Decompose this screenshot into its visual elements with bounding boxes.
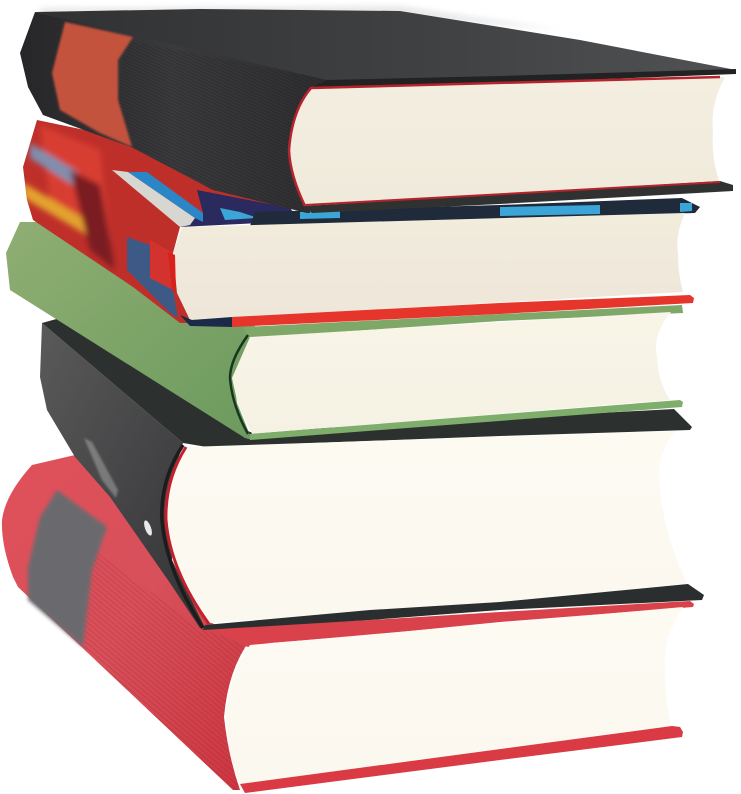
book 1: top black book: [20, 6, 736, 213]
pages of black book: [167, 431, 690, 623]
pages: [290, 77, 725, 206]
red edge strip: [168, 252, 176, 292]
red headband: [166, 447, 209, 624]
pages of red book: [226, 607, 683, 784]
red top edge of pages: [289, 77, 720, 206]
flap artwork patch: [220, 208, 258, 220]
book 4: black book: [40, 318, 704, 630]
spine corner art: [127, 237, 178, 318]
book 5: red bottom book: [2, 455, 694, 793]
blurred spine artwork: [22, 125, 115, 270]
green top cover: [243, 305, 683, 338]
blurred spine lettering: [84, 438, 118, 498]
faint shadow along the top: [40, 6, 560, 30]
dark blue corner: [180, 315, 232, 327]
patterned cover edge: [250, 198, 700, 226]
top cover: [35, 9, 736, 84]
red bottom cover: [240, 726, 683, 793]
spine of green book: [6, 222, 255, 440]
spine mark: [142, 519, 154, 537]
cover flap base: [180, 190, 300, 227]
bottom cover: [305, 181, 733, 213]
book 3: green book: [6, 222, 683, 440]
red top cover edge: [200, 601, 694, 647]
grey spine label: [28, 490, 107, 647]
red spine label: [52, 22, 133, 147]
green bottom cover: [250, 400, 683, 440]
pages of colourful book: [173, 213, 685, 320]
cover flap edge: [112, 170, 195, 227]
book 2: colourful book: [22, 120, 700, 327]
pages of green book: [232, 312, 671, 434]
red bottom cover: [232, 295, 694, 327]
black top cover: [42, 318, 692, 447]
spine of black book: [40, 323, 205, 628]
dark green headband: [230, 335, 248, 434]
cover front edge: [310, 69, 736, 88]
spine: [20, 12, 327, 213]
red spine: [23, 120, 290, 323]
spine of red book: [2, 455, 250, 790]
blue flap band: [128, 172, 203, 222]
black hinge: [162, 445, 203, 628]
black bottom cover: [203, 584, 704, 630]
